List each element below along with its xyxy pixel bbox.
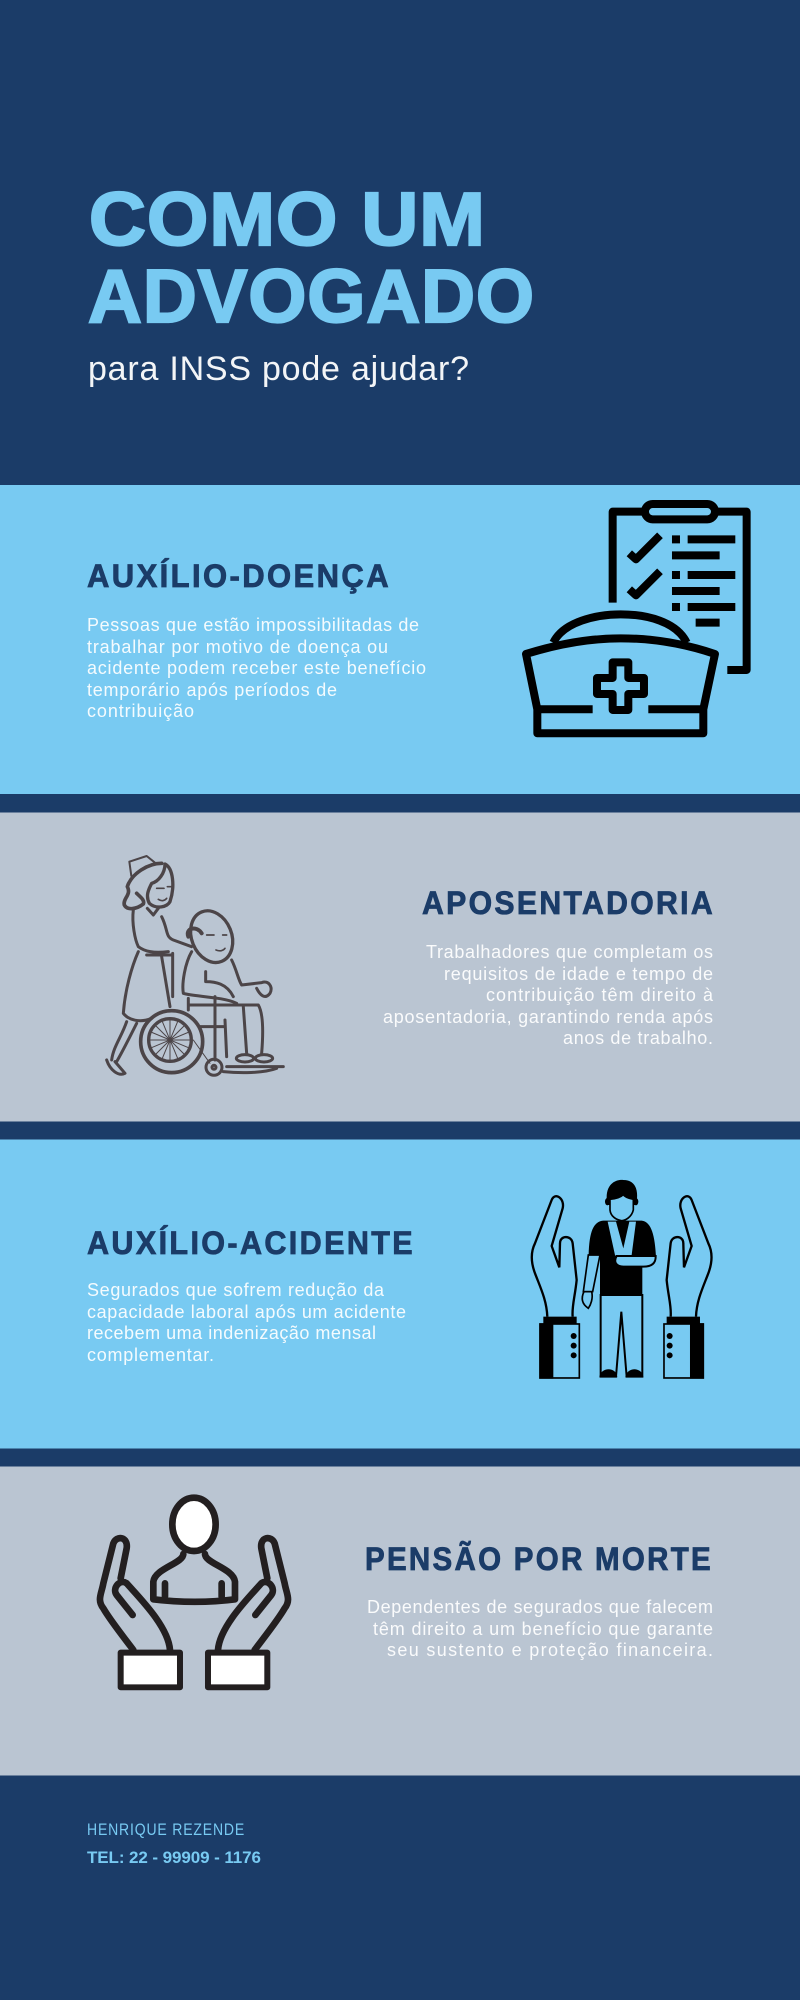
text block: aposentadoria: aposentadoria, garantindo renda após [383,1007,713,1027]
text block: pensão por morte [367,1597,713,1660]
text block: auxílio-doença: Pessoas que estão impossibilitadas de [87,615,419,635]
panel: auxílio-doença [0,485,800,794]
left hand [100,1538,180,1687]
text block: auxílio-acidente [87,1280,406,1365]
man in wheelchair [141,904,283,1075]
footer: contact: TEL: 22 - 99909 - 1176 [87,1848,261,1867]
text block: aposentadoria: contribuição têm direito à [486,985,714,1005]
text block: auxílio-doença: contribuição [87,701,194,721]
text block: auxílio-acidente: capacidade laboral após um acidente [87,1302,406,1322]
icon: injured man between protecting hands [532,1180,711,1379]
text block: auxílio-doença: acidente podem receber este benefício [87,658,426,678]
text block: pensão por morte: seu sustento e proteção financeira. [387,1640,713,1660]
footer: contact [87,1820,261,1867]
heading: auxílio-doença: AUXÍLIO-DOENÇA [87,557,391,594]
text block: auxílio-doença [87,615,426,721]
heading: auxílio-acidente: AUXÍLIO-ACIDENTE [87,1224,415,1261]
text block: aposentadoria: Trabalhadores que completam os [426,942,713,962]
left hand [532,1196,579,1379]
title [88,177,535,338]
title: ADVOGADO [88,254,535,338]
text block: pensão por morte: têm direito a um benefício que garante [373,1619,713,1639]
text block: pensão por morte: Dependentes de segurados que falecem [367,1597,713,1617]
icon: person between caring hands [100,1498,288,1687]
right hand [208,1538,288,1687]
text block: aposentadoria [383,942,714,1048]
person [582,1180,656,1377]
text block: auxílio-acidente: Segurados que sofrem redução da [87,1280,385,1300]
panel: pensão por morte [0,1466,800,1776]
nurse [107,856,192,1074]
text block: aposentadoria: anos de trabalho. [563,1028,713,1048]
panel: auxílio-acidente [0,1140,800,1448]
heading: pensão por morte: PENSÃO POR MORTE [365,1540,713,1577]
text block: aposentadoria: requisitos de idade e tempo de [444,964,713,984]
heading: aposentadoria: APOSENTADORIA [422,885,715,921]
text block: auxílio-acidente: recebem uma indenização mensal [87,1323,376,1343]
text block: auxílio-doença: trabalhar por motivo de doença ou [87,637,388,657]
subtitle: para INSS pode ajudar? [88,350,469,388]
icon: clipboard and nurse cap [526,504,747,733]
text block: auxílio-doença: temporário após períodos de [87,680,337,700]
panel: aposentadoria [0,812,800,1122]
text block: auxílio-acidente: complementar. [87,1345,214,1365]
right hand [664,1196,711,1379]
icon: nurse pushing man in wheelchair [107,856,283,1075]
footer: contact: HENRIQUE REZENDE [87,1820,245,1839]
title: COMO UM [89,177,486,261]
